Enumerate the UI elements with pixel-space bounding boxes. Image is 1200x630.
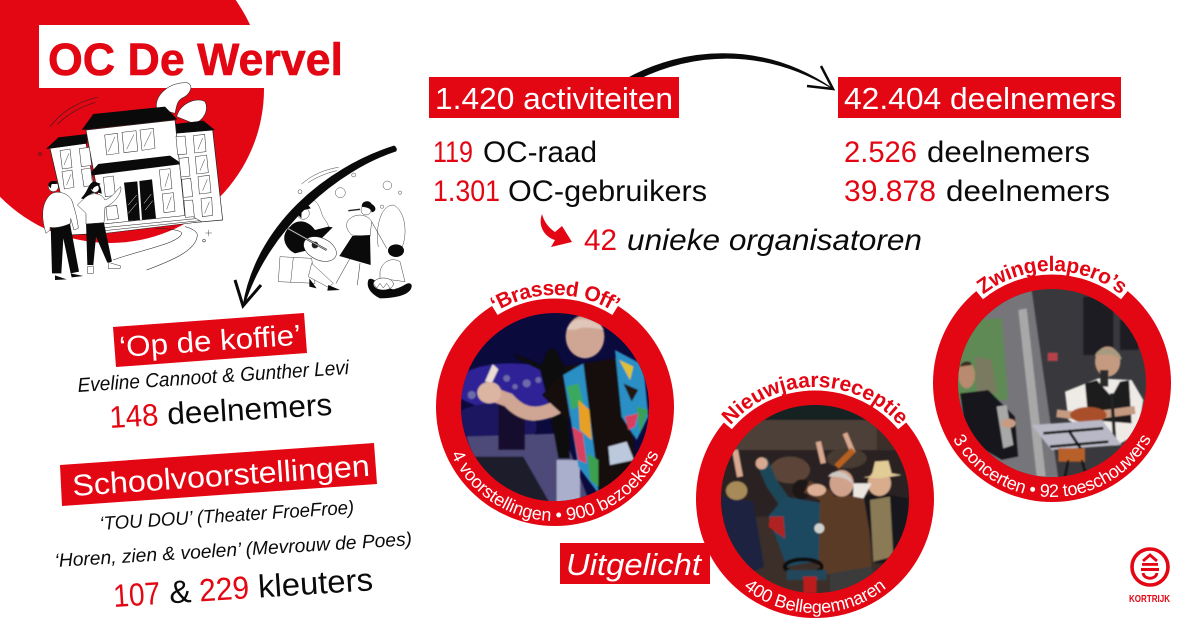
stat: 2.526 deelnemers: 2.526 (844, 136, 917, 169)
white label band (490, 285, 620, 304)
door (124, 181, 140, 221)
label: Uitgelicht: Uitgelicht (566, 547, 702, 582)
stat: 148 deelnemers: 148 (108, 397, 159, 435)
man (43, 181, 83, 280)
plants (156, 83, 191, 113)
woman (77, 182, 121, 273)
stat: 119 OC-raad: OC-raad (483, 136, 597, 169)
stat: 119 OC-raad (433, 136, 597, 169)
logo: Kortrijk (1129, 549, 1171, 605)
stat: 2.526 deelnemers: deelnemers (927, 136, 1090, 169)
caption: 3 concerten • 92 toeschouwers: 3 concerten • 92 toeschouwers (954, 434, 1150, 497)
stat: 148 deelnemers (108, 387, 333, 435)
stat: 119 OC-raad: 119 (433, 136, 473, 169)
panel: Zwingelapero's (933, 256, 1171, 502)
illustration: musicians (278, 167, 412, 298)
stat: 42 unieke organisatoren: 42 (584, 224, 617, 257)
stat: 148 deelnemers: deelnemers (166, 387, 333, 432)
text: TOU DOU (Theater FroeFroe): ‘TOU DOU’ (Theater FroeFroe) (99, 498, 355, 535)
steps (103, 215, 202, 233)
panel: Brassed Off (436, 281, 674, 526)
stat: 107 & 229 kleuters (112, 561, 374, 614)
road (113, 227, 197, 270)
drummer (380, 260, 405, 282)
panel: Nieuwjaarsreceptie (696, 376, 934, 618)
red background circle (0, 0, 264, 243)
label: Zwingelapero's: Zwingelapero’s (976, 256, 1126, 294)
heading: Op de koffie: ‘Op de koffie’ (118, 320, 302, 364)
heading: Schoolvoorstellingen: Schoolvoorstellingen (71, 450, 371, 503)
stat: 2.526 deelnemers (844, 136, 1090, 169)
photo: Brassed Off performer (450, 310, 650, 505)
singer (347, 215, 372, 237)
stat: 1.301 OC-gebruikers: 1.301 (433, 175, 500, 208)
arrow: red arrow to organisers (541, 214, 572, 247)
stat: 39.878 deelnemers (844, 175, 1110, 208)
stat: 107 & 229 kleuters: kleuters (257, 561, 374, 605)
heading: 1.420 activiteiten: 1.420 activiteiten (435, 81, 673, 116)
arrow: activiteiten to deelnemers (630, 54, 833, 89)
stat: 1.301 OC-gebruikers: OC-gebruikers (508, 175, 707, 208)
photo: crowd at reception (720, 400, 910, 595)
windows (60, 128, 213, 220)
stat: 107 & 229 kleuters: & (168, 573, 192, 610)
caption: 4 voorstellingen • 900 bezoekers: 4 voorstellingen • 900 bezoekers (454, 452, 658, 521)
stat: 107 & 229 kleuters: 107 (112, 575, 161, 614)
stat: 107 & 229 kleuters: 229 (198, 569, 250, 608)
ring (436, 288, 674, 526)
guitarist (308, 263, 333, 287)
illustration: building with two people (38, 83, 223, 280)
label: Brassed Off: ‘Brassed Off’ (490, 281, 621, 308)
wings (50, 143, 103, 235)
heading: 42.404 deelnemers: 42.404 deelnemers (844, 81, 1116, 116)
white label band (974, 261, 1130, 289)
stat: 42 unieke organisatoren: unieke organisatoren (627, 224, 922, 257)
centre block (86, 120, 185, 224)
text: Eveline Cannoot & Gunther Levi: Eveline Cannoot & Gunther Levi (77, 357, 350, 397)
photo: two musicians (955, 285, 1150, 480)
ring (933, 264, 1171, 502)
arrow: large curved arrow towards Op de koffie (235, 146, 396, 306)
white label band (722, 377, 908, 421)
logo: Kortrijk: KORTRIJK (1129, 594, 1171, 605)
text: Horen, zien & voelen (Mevrouw de Poes): ‘Horen, zien & voelen’ (Mevrouw de Poes) (54, 529, 413, 572)
stat: 39.878 deelnemers: 39.878 (844, 175, 936, 208)
label: Nieuwjaarsreceptie: Nieuwjaarsreceptie (721, 376, 906, 424)
title: OC De Wervel: OC De Wervel (48, 34, 343, 85)
ring (696, 380, 934, 618)
stat: 39.878 deelnemers: deelnemers (946, 175, 1110, 208)
caption: 400 Bellegemnaren: 400 Bellegemnaren (745, 582, 886, 617)
